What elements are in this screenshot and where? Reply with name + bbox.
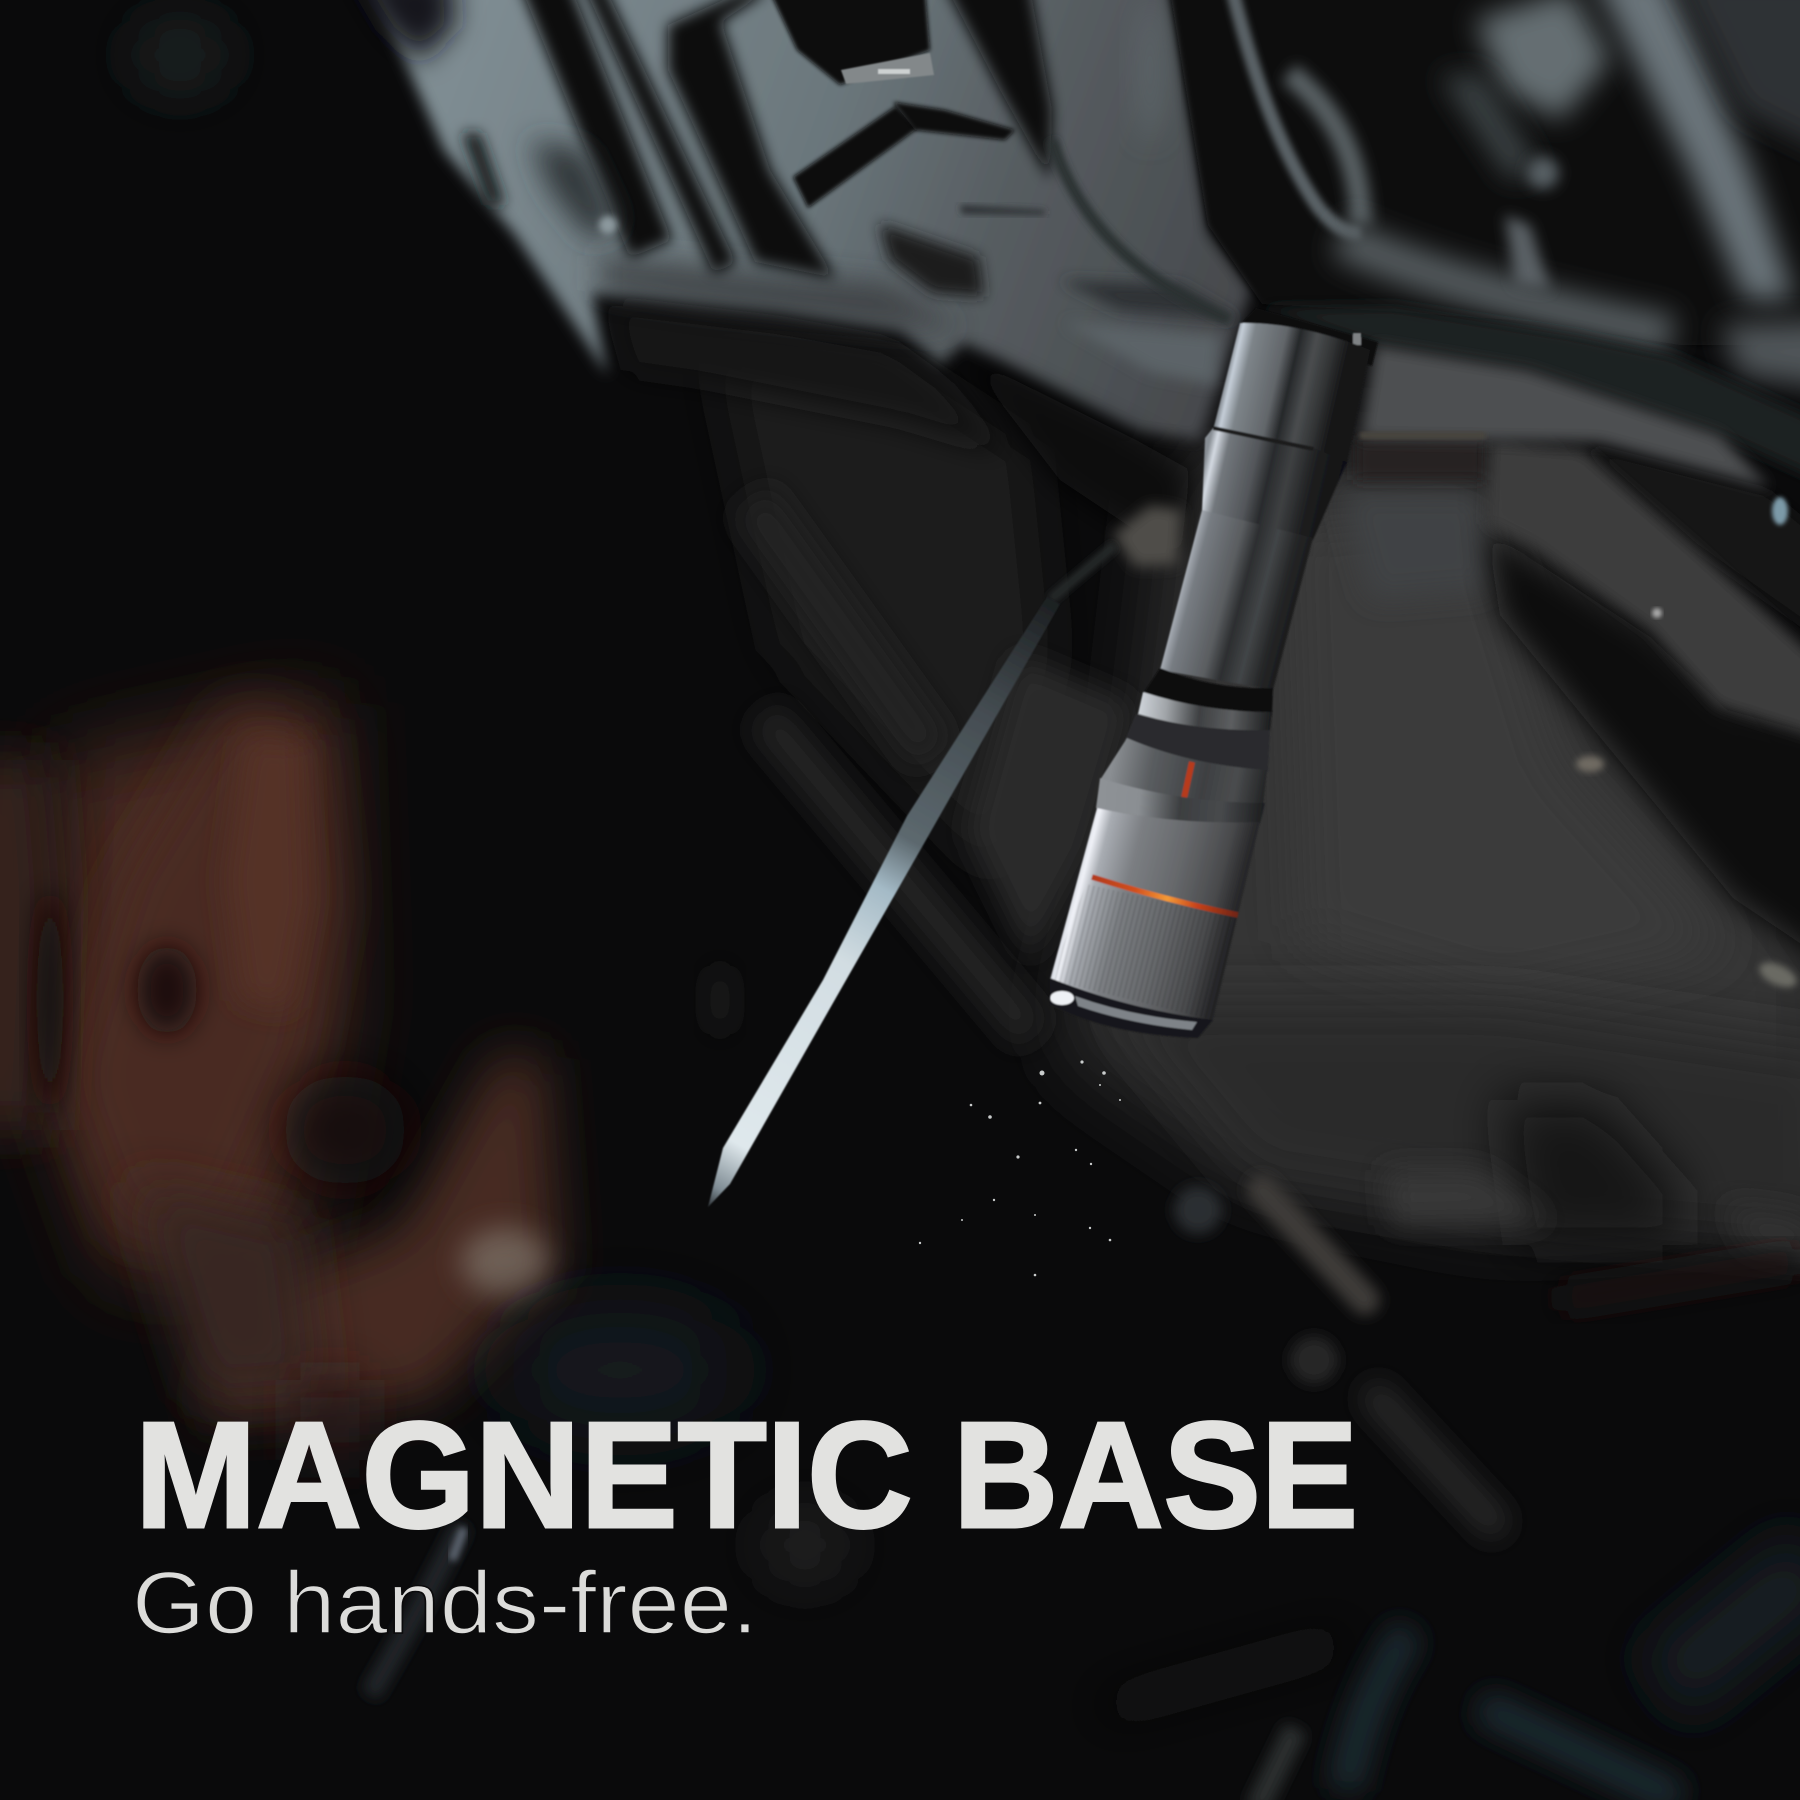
blurred tire and wheel arch	[715, 350, 1800, 1260]
orange ring	[1092, 877, 1238, 915]
head upper	[1100, 738, 1267, 806]
tire face highlights	[1285, 500, 1730, 1000]
heading: MAGNETIC BASE	[135, 1390, 1358, 1559]
bezel silver rim	[1075, 996, 1197, 1030]
collar silver ring	[1138, 692, 1272, 732]
upper body	[1202, 428, 1347, 540]
blurred foreground hoses	[300, 1186, 1800, 1800]
blurred knob	[1113, 505, 1182, 567]
lower body	[1160, 510, 1313, 690]
grey streak below underbody near flashlight	[1064, 322, 1220, 385]
flashlight mounted on magnetic base	[1050, 308, 1378, 1038]
tail section	[1213, 323, 1370, 465]
blurred face of mechanic	[0, 700, 740, 1430]
crossing dark bands	[750, 500, 933, 755]
bezel	[1050, 978, 1213, 1038]
seam	[1213, 426, 1314, 451]
sparks of dust	[919, 1060, 1121, 1276]
subheading: Go hands-free.	[132, 1553, 758, 1652]
knurled grip	[1050, 884, 1236, 1020]
head ring	[1096, 778, 1265, 824]
tire lower zone	[1100, 1000, 1800, 1250]
car underbody upper left	[130, 0, 1251, 600]
dark lug above rib	[1583, 446, 1800, 650]
car underbody upper right	[1165, 0, 1800, 490]
reflective metal blade	[708, 597, 1060, 1207]
lower grey shading	[600, 255, 960, 330]
dark stripes	[510, 0, 672, 258]
head lower	[1050, 808, 1260, 1020]
collar band	[1143, 668, 1273, 716]
textured rib	[1487, 442, 1800, 745]
magnetic cap	[1240, 308, 1378, 366]
orange index mark	[1183, 762, 1192, 803]
bracket	[668, 0, 835, 278]
dark focus ring	[1125, 714, 1270, 772]
dark under-edge	[612, 305, 1000, 450]
black hollow	[1487, 530, 1800, 970]
